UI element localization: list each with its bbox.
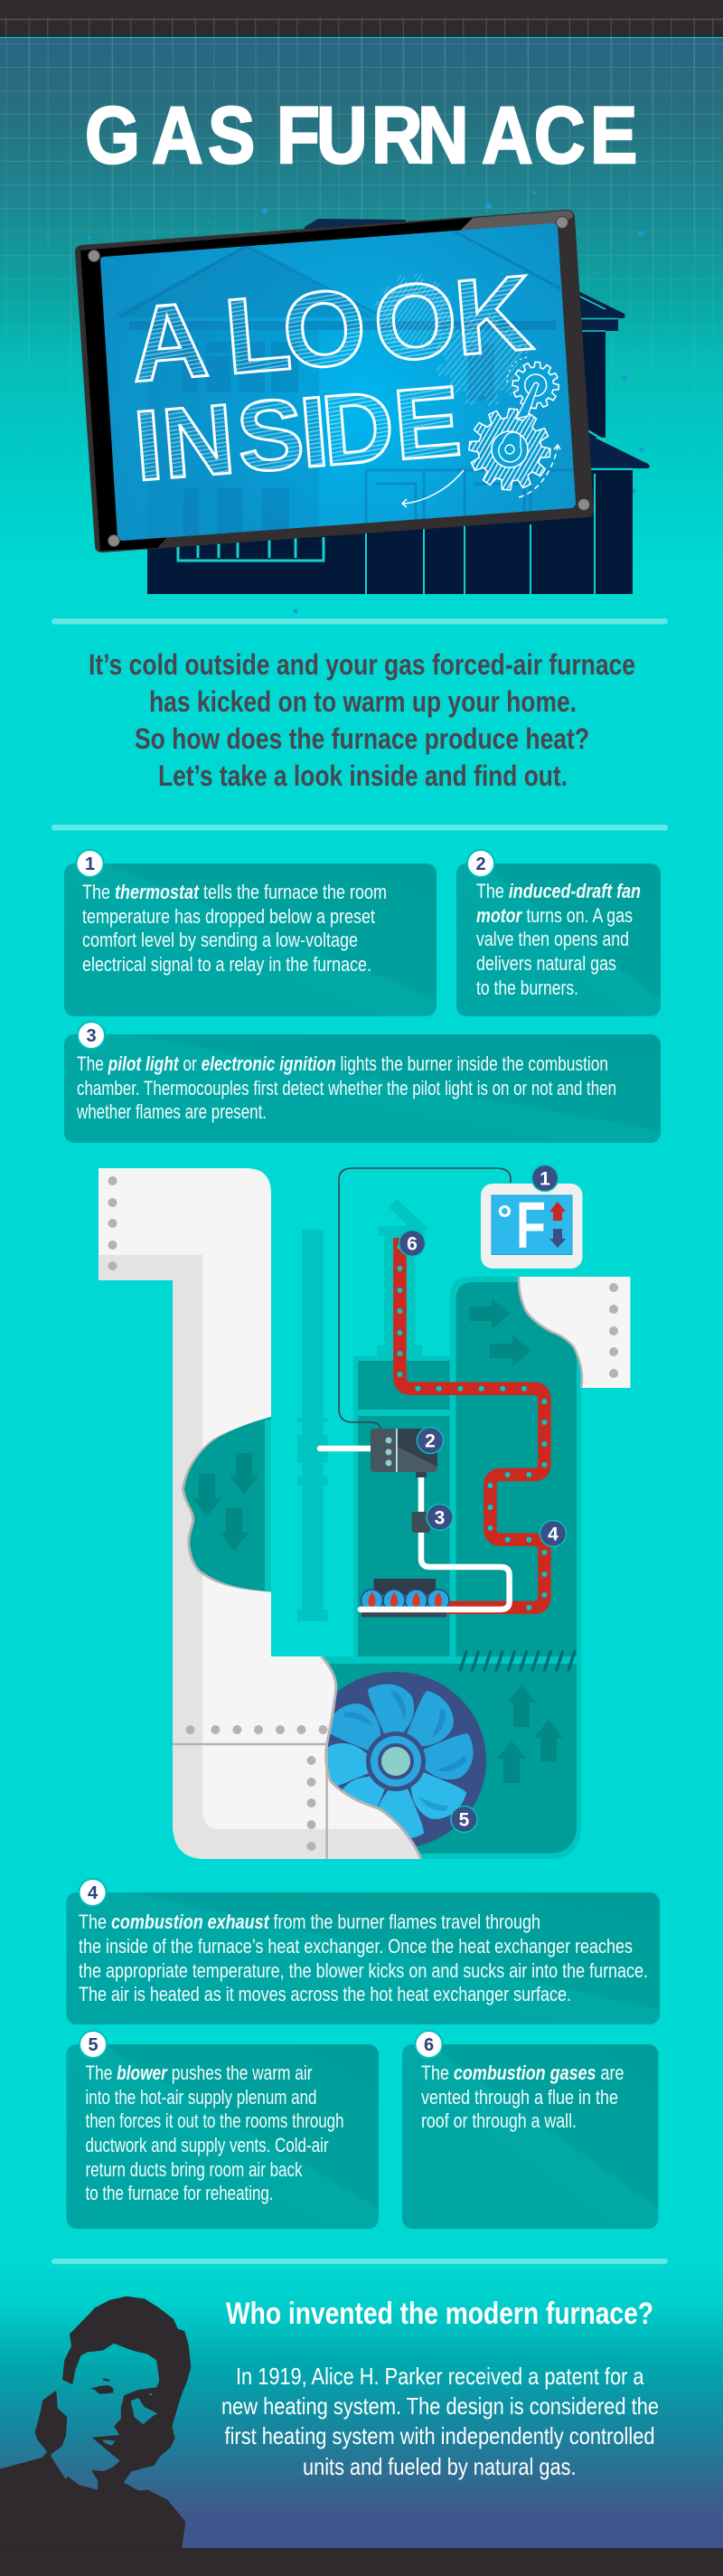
- thermostat: °: [497, 1197, 512, 1240]
- decorative blue dots: [88, 192, 643, 613]
- panel: step 4 combustion exhaust: The combustion exhaust from the burner flames travel through: [79, 1911, 540, 1933]
- top dark bar: [0, 0, 723, 37]
- heat exchanger cabinet: [450, 1277, 581, 1664]
- panel: step 5 blower: into the hot-air supply plenum and: [85, 2086, 316, 2109]
- panel: step 5 blower: ductwork and supply vents. Cold-air: [85, 2134, 329, 2156]
- airflow arrows: right: [469, 1298, 531, 1366]
- sign frame highlight: [459, 211, 573, 231]
- panel: step 6 combustion gases: roof or through a wall.: [421, 2109, 577, 2132]
- panel: step 3 pilot light: whether flames are present.: [76, 1100, 267, 1123]
- panel: step 4 combustion exhaust: 4: [88, 1883, 99, 1903]
- divider: [52, 825, 668, 830]
- panel: step 3 pilot light: [64, 1022, 661, 1143]
- ghost gear: [369, 268, 457, 356]
- panel: step 1 thermostat: comfort level by sending a low-voltage: [82, 929, 358, 951]
- divider: [52, 618, 668, 624]
- illustration: house silhouette: [147, 219, 650, 594]
- sign black inner frame: [80, 218, 473, 551]
- panel: step 2 induced-draft fan motor: to the burners.: [476, 977, 578, 999]
- airflow arrows: down: [192, 1453, 258, 1551]
- blower cabinet: [321, 1656, 581, 1859]
- arrows on sign: [402, 357, 560, 507]
- panel: step 5 blower: then forces it out to the rooms through: [85, 2109, 343, 2132]
- paragraph: Alice H. Parker: [221, 2363, 659, 2480]
- ghost house on screen: [116, 231, 578, 547]
- screws: [89, 217, 589, 546]
- panel: step 6 combustion gases: vented through a flue in the: [421, 2086, 618, 2109]
- panel: step 4 combustion exhaust: The air is heated as it moves across the hot heat exchanger surface.: [79, 1983, 571, 2005]
- panel: step 6 combustion gases: The combustion gases are: [421, 2062, 624, 2084]
- thermostat: F: [516, 1190, 546, 1262]
- duct seams and rivets: [108, 1176, 327, 1859]
- thermostat: [481, 1184, 582, 1269]
- panel: step 2 induced-draft fan motor: [456, 850, 661, 1016]
- panel: step 1 thermostat: 1: [85, 854, 95, 874]
- panel: step 4 combustion exhaust: [67, 1879, 660, 2024]
- panel: step 1 thermostat: The thermostat tells the furnace the room: [82, 881, 387, 903]
- panel: step 5 blower: The blower pushes the warm air: [85, 2062, 313, 2084]
- panel: step 5 blower: return ducts bring room air back: [85, 2158, 303, 2181]
- vent pipe: [297, 1230, 327, 1621]
- diagram number badges: 2: [425, 1430, 436, 1452]
- control wire: [339, 1168, 511, 1429]
- panel: step 2 induced-draft fan motor: motor turns on. A gas: [476, 904, 633, 927]
- icon: small gear: [511, 360, 560, 419]
- panel: step 5 blower: [67, 2031, 379, 2229]
- panel: step 2 induced-draft fan motor: valve then opens and: [476, 928, 629, 950]
- title: GAS FURNACE: [85, 90, 637, 180]
- sign frame: [75, 210, 594, 552]
- panel: step 6 combustion gases: [402, 2031, 658, 2229]
- header background gradient with blueprint grid: [0, 38, 723, 508]
- divider: [52, 2259, 668, 2264]
- duct shaded edge: [99, 1255, 421, 1859]
- diagram number badges: 1: [540, 1168, 550, 1190]
- ignition control: [412, 1512, 430, 1533]
- left duct cutaway: [182, 1417, 271, 1592]
- blower fan: [304, 1672, 486, 1849]
- furnace diagram: [99, 1165, 631, 1859]
- intro text: Let’s take a look inside and find out.: [158, 760, 568, 792]
- duct cutaway edge over fan: [322, 1656, 421, 1859]
- paragraph: Alice H. Parker: In 1919, Alice H. Parker received a patent for a: [236, 2363, 644, 2390]
- panel: step 5 blower: 5: [88, 2035, 99, 2055]
- diagram number badges: [399, 1165, 566, 1832]
- sign text: A LOOK: A LOOK: [126, 253, 537, 405]
- burners: [361, 1579, 449, 1617]
- panel: step 1 thermostat: electrical signal to a relay in the furnace.: [82, 953, 371, 976]
- white gas pipes: [320, 1448, 510, 1609]
- intro text: [89, 648, 635, 792]
- diagram number badges: 4: [548, 1524, 559, 1544]
- panel: step 1 thermostat: [64, 850, 437, 1016]
- red exhaust pipe: [397, 1238, 547, 1610]
- panel: step 1 thermostat: temperature has dropped below a preset: [82, 905, 375, 928]
- intro text: So how does the furnace produce heat?: [135, 722, 589, 755]
- tilted sign: [75, 210, 594, 552]
- footer dark bar: [0, 2548, 723, 2576]
- panel: step 6 combustion gases: 6: [424, 2035, 434, 2055]
- icon: large gear: [466, 406, 553, 493]
- panel: step 2 induced-draft fan motor: delivers natural gas: [476, 952, 616, 975]
- panel: step 3 pilot light: 3: [86, 1026, 97, 1046]
- upper right white duct: [519, 1277, 631, 1388]
- diagram number badges: 6: [407, 1233, 418, 1255]
- footer background gradient: [0, 2260, 723, 2548]
- sign text: INSIDE: INSIDE: [130, 365, 465, 502]
- sign screen: [100, 223, 576, 541]
- ghost gear: [425, 303, 539, 417]
- icon: exchanger slats: [460, 1652, 575, 1670]
- panel: step 2 induced-draft fan motor: The induced-draft fan: [476, 880, 641, 902]
- panel: step 2 induced-draft fan motor: 2: [475, 854, 486, 874]
- portrait silhouette: Alice H. Parker: [0, 2297, 191, 2550]
- paragraph: Alice H. Parker: first heating system with independently controlled: [224, 2422, 654, 2449]
- diagram number badges: 3: [435, 1508, 445, 1528]
- panel: step 5 blower: to the furnace for reheating.: [85, 2182, 273, 2204]
- diagram number badges: 5: [459, 1810, 470, 1830]
- panel: step 3 pilot light: The pilot light or electronic ignition lights the burner inside the combustion: [77, 1052, 608, 1075]
- main white duct: [99, 1168, 421, 1859]
- paragraph: Alice H. Parker: units and fueled by natural gas.: [303, 2453, 577, 2480]
- furnace combustion compartment: [353, 1356, 455, 1664]
- intro text: has kicked on to warm up your home.: [149, 685, 577, 718]
- flue: [377, 1199, 427, 1358]
- airflow arrows: up: [497, 1684, 563, 1783]
- gas valve: [371, 1429, 437, 1477]
